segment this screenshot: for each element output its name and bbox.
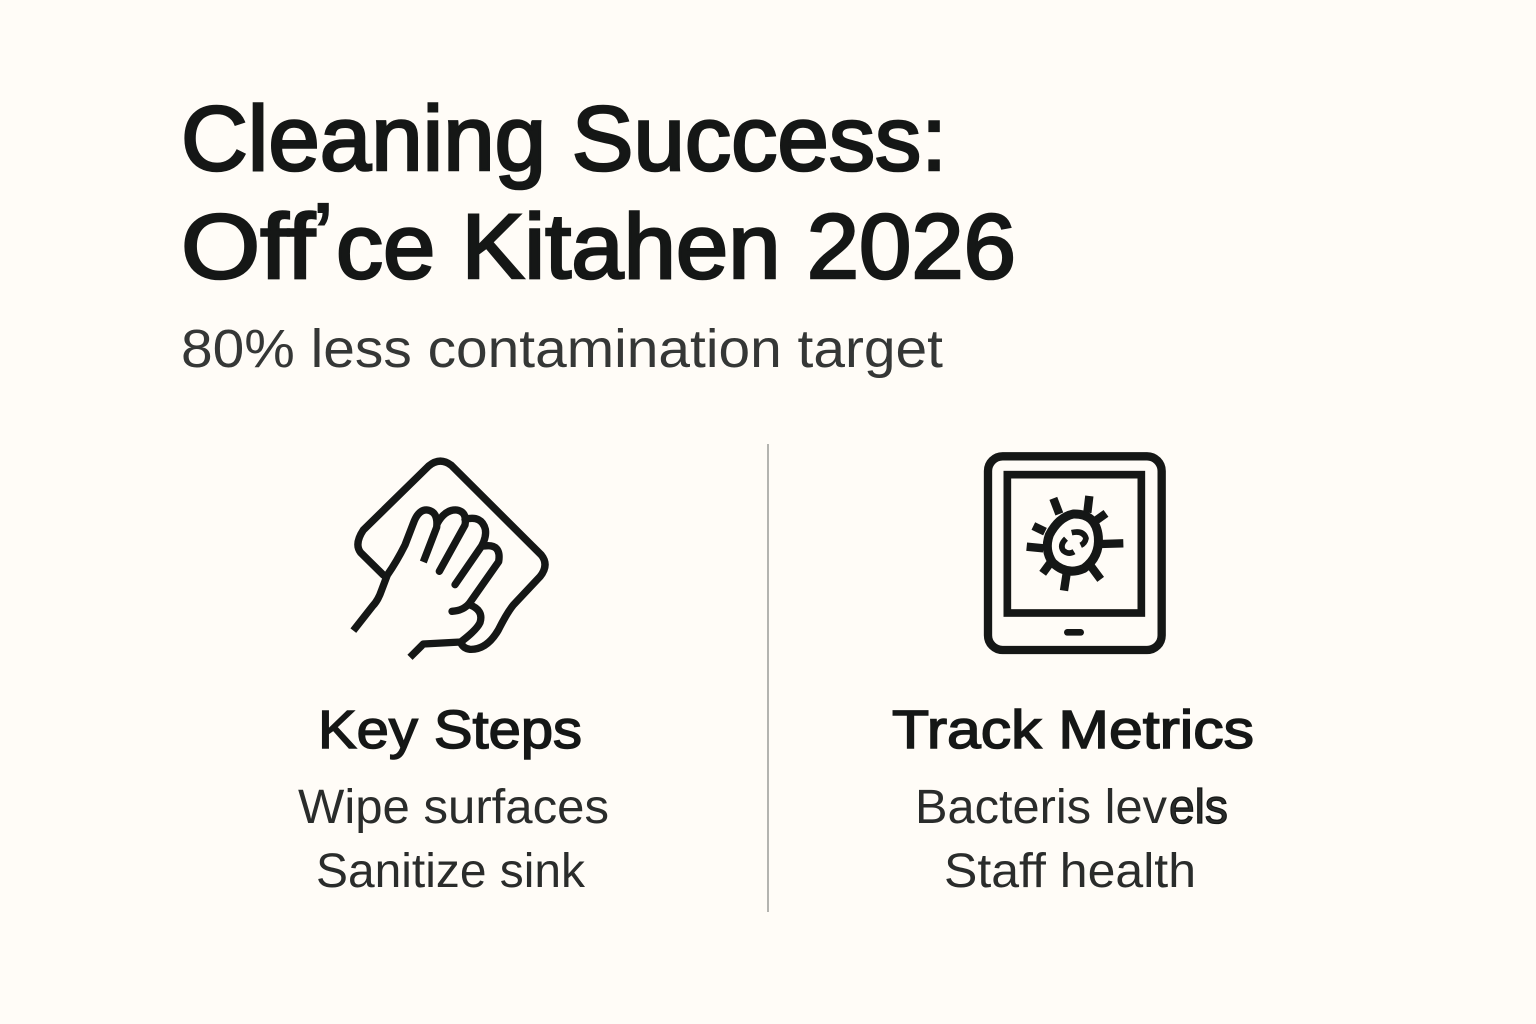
panel: track metrics: [892, 456, 1254, 898]
text: staff health: Staff health: [944, 845, 1196, 898]
text: bacteria levels: els: [1169, 781, 1228, 834]
panel: key steps: [298, 461, 609, 898]
icon: hand wiping with cloth: [350, 457, 549, 660]
heading: track metrics: Track Metrics: [892, 700, 1254, 760]
heading: key steps: Key Steps: [318, 700, 582, 760]
text: bacteria levels: Bacteris lev: [915, 781, 1167, 834]
text: sanitize sink: Sanitize sink: [316, 845, 586, 898]
subtitle: 80% less contamination target: [181, 319, 943, 379]
title: ’: [312, 186, 334, 275]
text: wipe surfaces: Wipe surfaces: [298, 781, 609, 834]
icon: tablet with germ: [984, 452, 1166, 654]
title: Off: [181, 196, 315, 298]
title: Cleaning Success:: [181, 88, 947, 190]
title: [181, 88, 1016, 298]
divider: [767, 444, 769, 912]
title: ce Kitahen 2026: [336, 196, 1016, 298]
